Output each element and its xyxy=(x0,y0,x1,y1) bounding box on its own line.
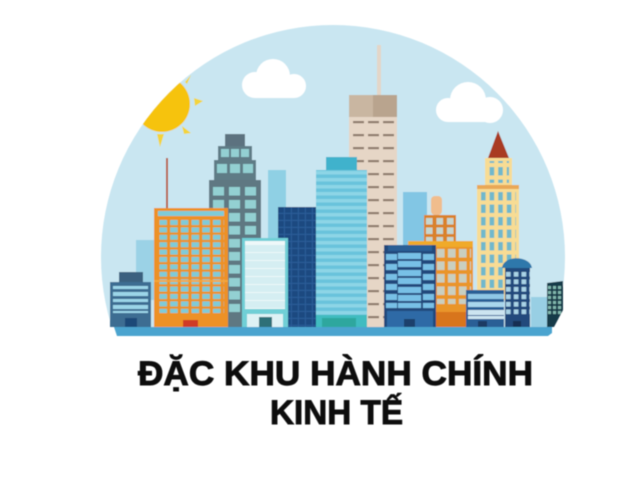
navy building xyxy=(278,207,316,327)
icon: sun xyxy=(142,75,204,147)
icon: right cloud xyxy=(436,82,503,123)
dark far-right building xyxy=(547,281,563,327)
teal glass tower xyxy=(316,157,367,327)
title line 2: KINH TẾ xyxy=(270,394,403,432)
pale glass building xyxy=(242,238,288,327)
infographic illustration xyxy=(100,24,566,426)
navy wide building xyxy=(384,245,436,327)
small left building xyxy=(110,272,151,327)
background buildings xyxy=(136,170,552,327)
title xyxy=(138,355,533,432)
city illustration xyxy=(100,24,566,337)
beige skyscraper xyxy=(349,45,397,327)
icon: left cloud xyxy=(242,59,306,98)
yellow clock tower xyxy=(477,131,519,300)
ground strip xyxy=(114,327,552,336)
sky dome xyxy=(100,24,566,328)
right orange building xyxy=(408,196,473,327)
low blue building xyxy=(466,290,504,327)
orange building xyxy=(154,158,228,327)
gray tower xyxy=(209,134,261,327)
navy domed tower xyxy=(502,258,532,327)
title line 1: ĐẶC KHU HÀNH CHÍNH xyxy=(138,355,533,393)
